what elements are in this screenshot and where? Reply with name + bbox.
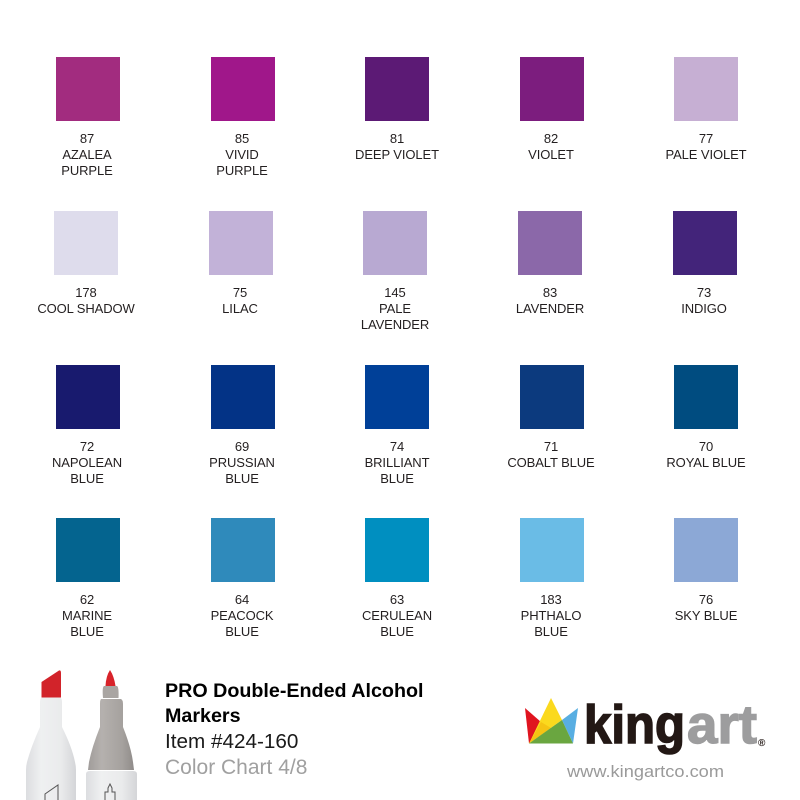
- label: 71 cobalt blue: 71: [544, 439, 558, 454]
- label: 87 azalea purple: 87: [80, 131, 94, 146]
- label: 63 cerulean blue: [362, 592, 432, 639]
- swatch: 74 brilliant blue: [365, 365, 429, 429]
- label: 73 indigo: INDIGO: [681, 301, 727, 316]
- chisel nib marker: [26, 670, 76, 800]
- label: 85 vivid purple: PURPLE: [216, 163, 268, 178]
- label: 75 lilac: 75: [233, 285, 247, 300]
- label: 81 deep violet: DEEP VIOLET: [355, 147, 439, 162]
- label: 69 prussian blue: 69: [235, 439, 249, 454]
- swatch: 145 pale lavender: [363, 211, 427, 275]
- label: 70 royal blue: 70: [699, 439, 713, 454]
- label: 63 cerulean blue: CERULEAN: [362, 608, 432, 623]
- label: 64 peacock blue: [211, 592, 274, 639]
- swatch: 82 violet: [520, 57, 584, 121]
- label: 62 marine blue: 62: [80, 592, 94, 607]
- label: 71 cobalt blue: [507, 439, 595, 470]
- label: 85 vivid purple: 85: [235, 131, 249, 146]
- label: 71 cobalt blue: COBALT BLUE: [507, 455, 595, 470]
- label: 72 napolean blue: 72: [80, 439, 94, 454]
- swatch: 73 indigo: [673, 211, 737, 275]
- swatch: 76 sky blue: [674, 518, 738, 582]
- label: 82 violet: VIOLET: [528, 147, 574, 162]
- swatch: 71 cobalt blue: [520, 365, 584, 429]
- label: 73 indigo: 73: [697, 285, 711, 300]
- label: 62 marine blue: [62, 592, 112, 639]
- label: 76 sky blue: 76: [699, 592, 713, 607]
- label: 74 brilliant blue: [365, 439, 430, 486]
- label: 183 phthalo blue: BLUE: [534, 624, 568, 639]
- icon: crown: [525, 698, 578, 744]
- swatch: 70 royal blue: [674, 365, 738, 429]
- swatch: 64 peacock blue: [211, 518, 275, 582]
- label: 76 sky blue: SKY BLUE: [675, 608, 737, 623]
- label: 70 royal blue: [666, 439, 746, 470]
- label: 63 cerulean blue: BLUE: [380, 624, 414, 639]
- label: 81 deep violet: [355, 131, 439, 162]
- label: 183 phthalo blue: PHTHALO: [521, 608, 581, 623]
- bullet nib marker: [86, 670, 137, 800]
- label: 69 prussian blue: PRUSSIAN: [209, 455, 275, 470]
- label: 74 brilliant blue: BRILLIANT: [365, 455, 429, 470]
- label: 87 azalea purple: AZALEA: [62, 147, 112, 162]
- swatch: 81 deep violet: [365, 57, 429, 121]
- swatch: 178 cool shadow: [54, 211, 118, 275]
- label: 77 pale violet: 77: [699, 131, 713, 146]
- label: 72 napolean blue: [52, 439, 122, 486]
- text: color chart page: Color Chart 4/8: [165, 756, 307, 779]
- registered mark: ®: [758, 738, 766, 749]
- label: 62 marine blue: BLUE: [70, 624, 104, 639]
- label: 178 cool shadow: COOL SHADOW: [37, 301, 135, 316]
- label: 82 violet: 82: [544, 131, 558, 146]
- label: 63 cerulean blue: 63: [390, 592, 404, 607]
- label: 74 brilliant blue: 74: [390, 439, 404, 454]
- swatch: 183 phthalo blue: [520, 518, 584, 582]
- title: product name: PRO Double-Ended Alcohol: [165, 680, 424, 702]
- label: 85 vivid purple: VIVID: [225, 147, 259, 162]
- swatch: 77 pale violet: [674, 57, 738, 121]
- label: 72 napolean blue: BLUE: [70, 471, 104, 486]
- label: 178 cool shadow: 178: [75, 285, 97, 300]
- logo: kingart: [525, 695, 766, 781]
- label: 145 pale lavender: 145: [384, 285, 406, 300]
- label: 183 phthalo blue: 183: [540, 592, 562, 607]
- label: 81 deep violet: 81: [390, 131, 404, 146]
- label: 77 pale violet: PALE VIOLET: [665, 147, 747, 162]
- label: 77 pale violet: [665, 131, 747, 162]
- label: 70 royal blue: ROYAL BLUE: [666, 455, 746, 470]
- wordmark: king: king: [584, 695, 685, 755]
- title: product name: [165, 680, 424, 727]
- label: 145 pale lavender: [361, 285, 429, 332]
- swatch: 75 lilac: [209, 211, 273, 275]
- swatch: 85 vivid purple: [211, 57, 275, 121]
- wordmark: art: art: [687, 695, 757, 755]
- text: item number: Item #424-160: [165, 730, 298, 753]
- label: 74 brilliant blue: BLUE: [380, 471, 414, 486]
- label: 87 azalea purple: [61, 131, 113, 178]
- label: 76 sky blue: [675, 592, 737, 623]
- label: 73 indigo: [681, 285, 727, 316]
- swatch: 63 cerulean blue: [365, 518, 429, 582]
- label: 83 lavender: LAVENDER: [516, 301, 584, 316]
- swatch: 62 marine blue: [56, 518, 120, 582]
- swatch: 72 napolean blue: [56, 365, 120, 429]
- label: 178 cool shadow: [37, 285, 135, 316]
- label: 64 peacock blue: BLUE: [225, 624, 259, 639]
- label: 87 azalea purple: PURPLE: [61, 163, 113, 178]
- label: 64 peacock blue: 64: [235, 592, 249, 607]
- swatch: 83 lavender: [518, 211, 582, 275]
- label: 85 vivid purple: [216, 131, 268, 178]
- label: 62 marine blue: MARINE: [62, 608, 112, 623]
- label: 145 pale lavender: PALE: [379, 301, 411, 316]
- label: 75 lilac: [222, 285, 258, 316]
- label: 83 lavender: [516, 285, 584, 316]
- icon: two marker pens: [26, 670, 137, 800]
- label: 72 napolean blue: NAPOLEAN: [52, 455, 122, 470]
- label: 69 prussian blue: [209, 439, 275, 486]
- label: 69 prussian blue: BLUE: [225, 471, 259, 486]
- swatch: 87 azalea purple: [56, 57, 120, 121]
- url: www.kingartco.com: [566, 762, 724, 781]
- label: 183 phthalo blue: [521, 592, 581, 639]
- label: 82 violet: [528, 131, 574, 162]
- swatch: 69 prussian blue: [211, 365, 275, 429]
- label: 75 lilac: LILAC: [222, 301, 258, 316]
- label: 83 lavender: 83: [543, 285, 557, 300]
- label: 64 peacock blue: PEACOCK: [211, 608, 273, 623]
- title: product name: Markers: [165, 705, 241, 727]
- label: 145 pale lavender: LAVENDER: [361, 317, 429, 332]
